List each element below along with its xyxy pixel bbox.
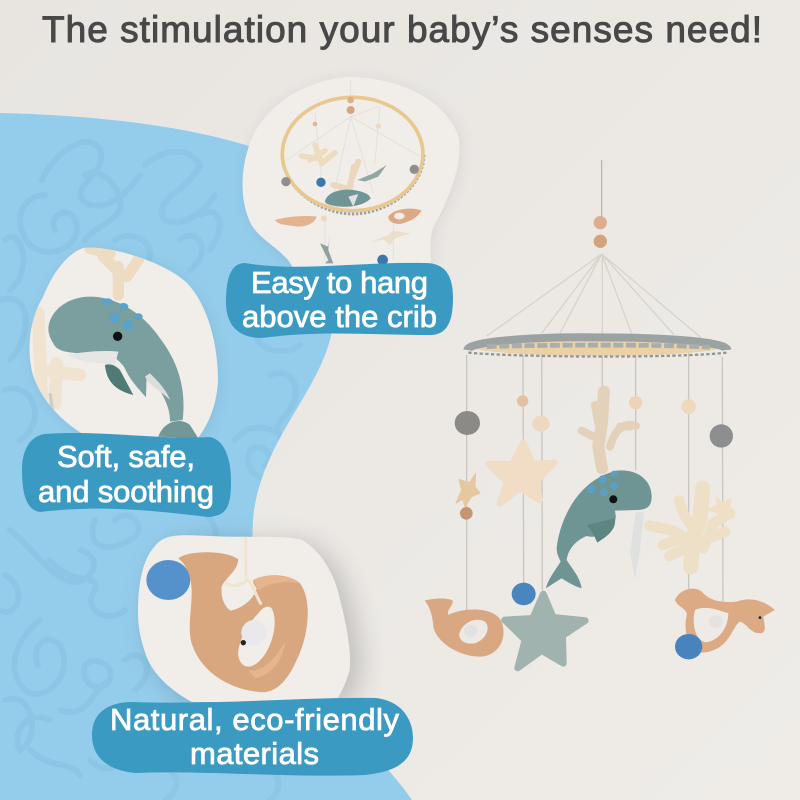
- large felt coral: [649, 488, 730, 567]
- label: natural materials: [92, 698, 413, 776]
- label: easy to hang: above the crib: [242, 299, 437, 334]
- wooden seahorse teether: [675, 589, 775, 653]
- label: natural materials: Natural, eco-friendly: [110, 702, 400, 737]
- small cream star behind coral: [705, 495, 735, 518]
- small wooden star: [456, 473, 480, 507]
- coral: [302, 145, 335, 163]
- felt whale: [546, 470, 652, 588]
- cream star: [369, 231, 411, 245]
- blue felt balls: [512, 583, 536, 605]
- side belly: [145, 373, 170, 400]
- whale body: [48, 297, 184, 422]
- wood beads: [460, 395, 696, 520]
- tail: [158, 421, 198, 438]
- coral above whale: [90, 248, 138, 295]
- blue wave panel: [0, 100, 430, 800]
- label: soft, safe: Soft, safe,: [57, 439, 195, 474]
- label: soft, safe: [22, 433, 231, 517]
- blue bead: [316, 178, 326, 187]
- wooden whale teether: [425, 598, 504, 657]
- wood teethers: [275, 216, 317, 227]
- cream felt star: [489, 443, 554, 503]
- ring: [282, 97, 423, 211]
- support strings: [487, 254, 701, 337]
- blue ball over seahorse: [675, 634, 702, 659]
- label: natural materials: materials: [190, 736, 319, 771]
- gray balls: [281, 177, 291, 186]
- wooden hoop: [467, 334, 727, 356]
- gray whale tail piece: [357, 165, 387, 182]
- ring trim: [282, 155, 424, 214]
- strings: [287, 80, 421, 262]
- hanging strings: [467, 340, 723, 660]
- gray-green felt star: [505, 594, 585, 668]
- bead: [241, 620, 252, 638]
- title: The stimulation your baby’s senses need!: [42, 9, 762, 50]
- label: soft, safe: and soothing: [38, 474, 214, 509]
- fin: [105, 364, 133, 395]
- blue felt ball: [146, 560, 190, 600]
- pale coral: [38, 313, 80, 403]
- hanging pieces: [320, 233, 333, 263]
- top felt coral: [582, 392, 636, 468]
- main ocean mobile: [425, 160, 775, 668]
- photo blob: mobile from below: [242, 77, 459, 268]
- string: [226, 537, 261, 603]
- photo blob: felt whale: [30, 248, 218, 438]
- top beads: [594, 216, 607, 248]
- blue spots: [102, 298, 143, 331]
- eye: [113, 332, 122, 341]
- coral centre: [333, 162, 358, 189]
- label: easy to hang: Easy to hang: [251, 265, 428, 300]
- gray felt balls: [455, 411, 733, 448]
- gray pompom trim: [467, 337, 727, 357]
- wooden whale: [178, 552, 308, 692]
- photo blob: wooden whale: [138, 535, 350, 702]
- whale from below: [325, 190, 371, 207]
- label: easy to hang: [226, 263, 453, 338]
- belly: [67, 351, 118, 365]
- top string: [600, 160, 604, 217]
